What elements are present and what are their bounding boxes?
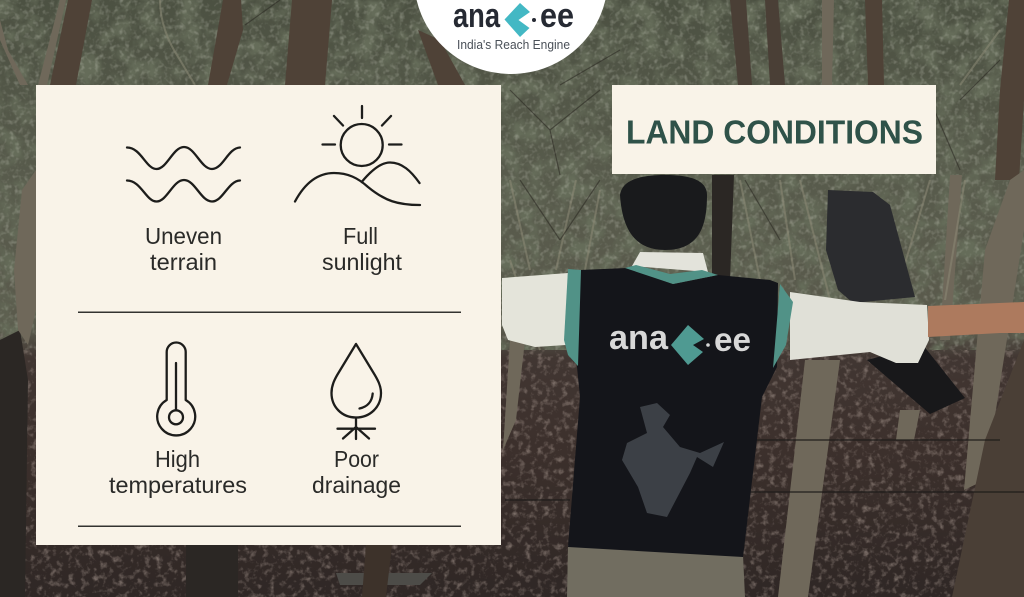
right forearm and hand [928,302,1024,337]
logo wordmark [453,0,574,37]
label: Poor drainage: drainage [312,472,401,498]
India map on vest [622,403,724,517]
icon: water drop with roots [332,344,381,439]
label: Poor drainage [312,446,401,498]
panel: land conditions icons [36,85,501,545]
shirt collar [632,252,708,272]
label: High temperatures: High [155,446,200,472]
label: High temperatures: temperatures [109,472,247,498]
label: Poor drainage: Poor [334,446,379,472]
label: High temperatures [109,446,247,498]
label: Uneven terrain: Uneven [145,223,222,249]
left sleeve [502,273,568,347]
label: Full sunlight: sunlight [322,249,403,275]
tagline: India's Reach Engine [457,38,570,52]
label: Uneven terrain: terrain [150,249,217,275]
head [620,175,707,250]
vest [568,268,778,557]
title: LAND CONDITIONS [626,114,923,150]
icon: sun over hills [295,106,420,205]
trousers [567,545,745,597]
vest logo: ana [609,319,669,357]
right sleeve [790,292,929,363]
icon: uneven terrain waves [127,147,240,202]
title box [612,85,936,174]
label: Uneven terrain [145,223,222,275]
icon: thermometer [157,342,195,435]
black cloth on branch [826,190,965,414]
label: Full sunlight [322,223,403,275]
vest logo: ee [714,321,751,358]
label: Full sunlight: Full [343,223,378,249]
tree trunks [50,0,1024,180]
person from behind with arms outstretched [502,175,1024,597]
vest logo [609,319,751,365]
vest trims [564,265,793,368]
logo badge [414,0,608,74]
